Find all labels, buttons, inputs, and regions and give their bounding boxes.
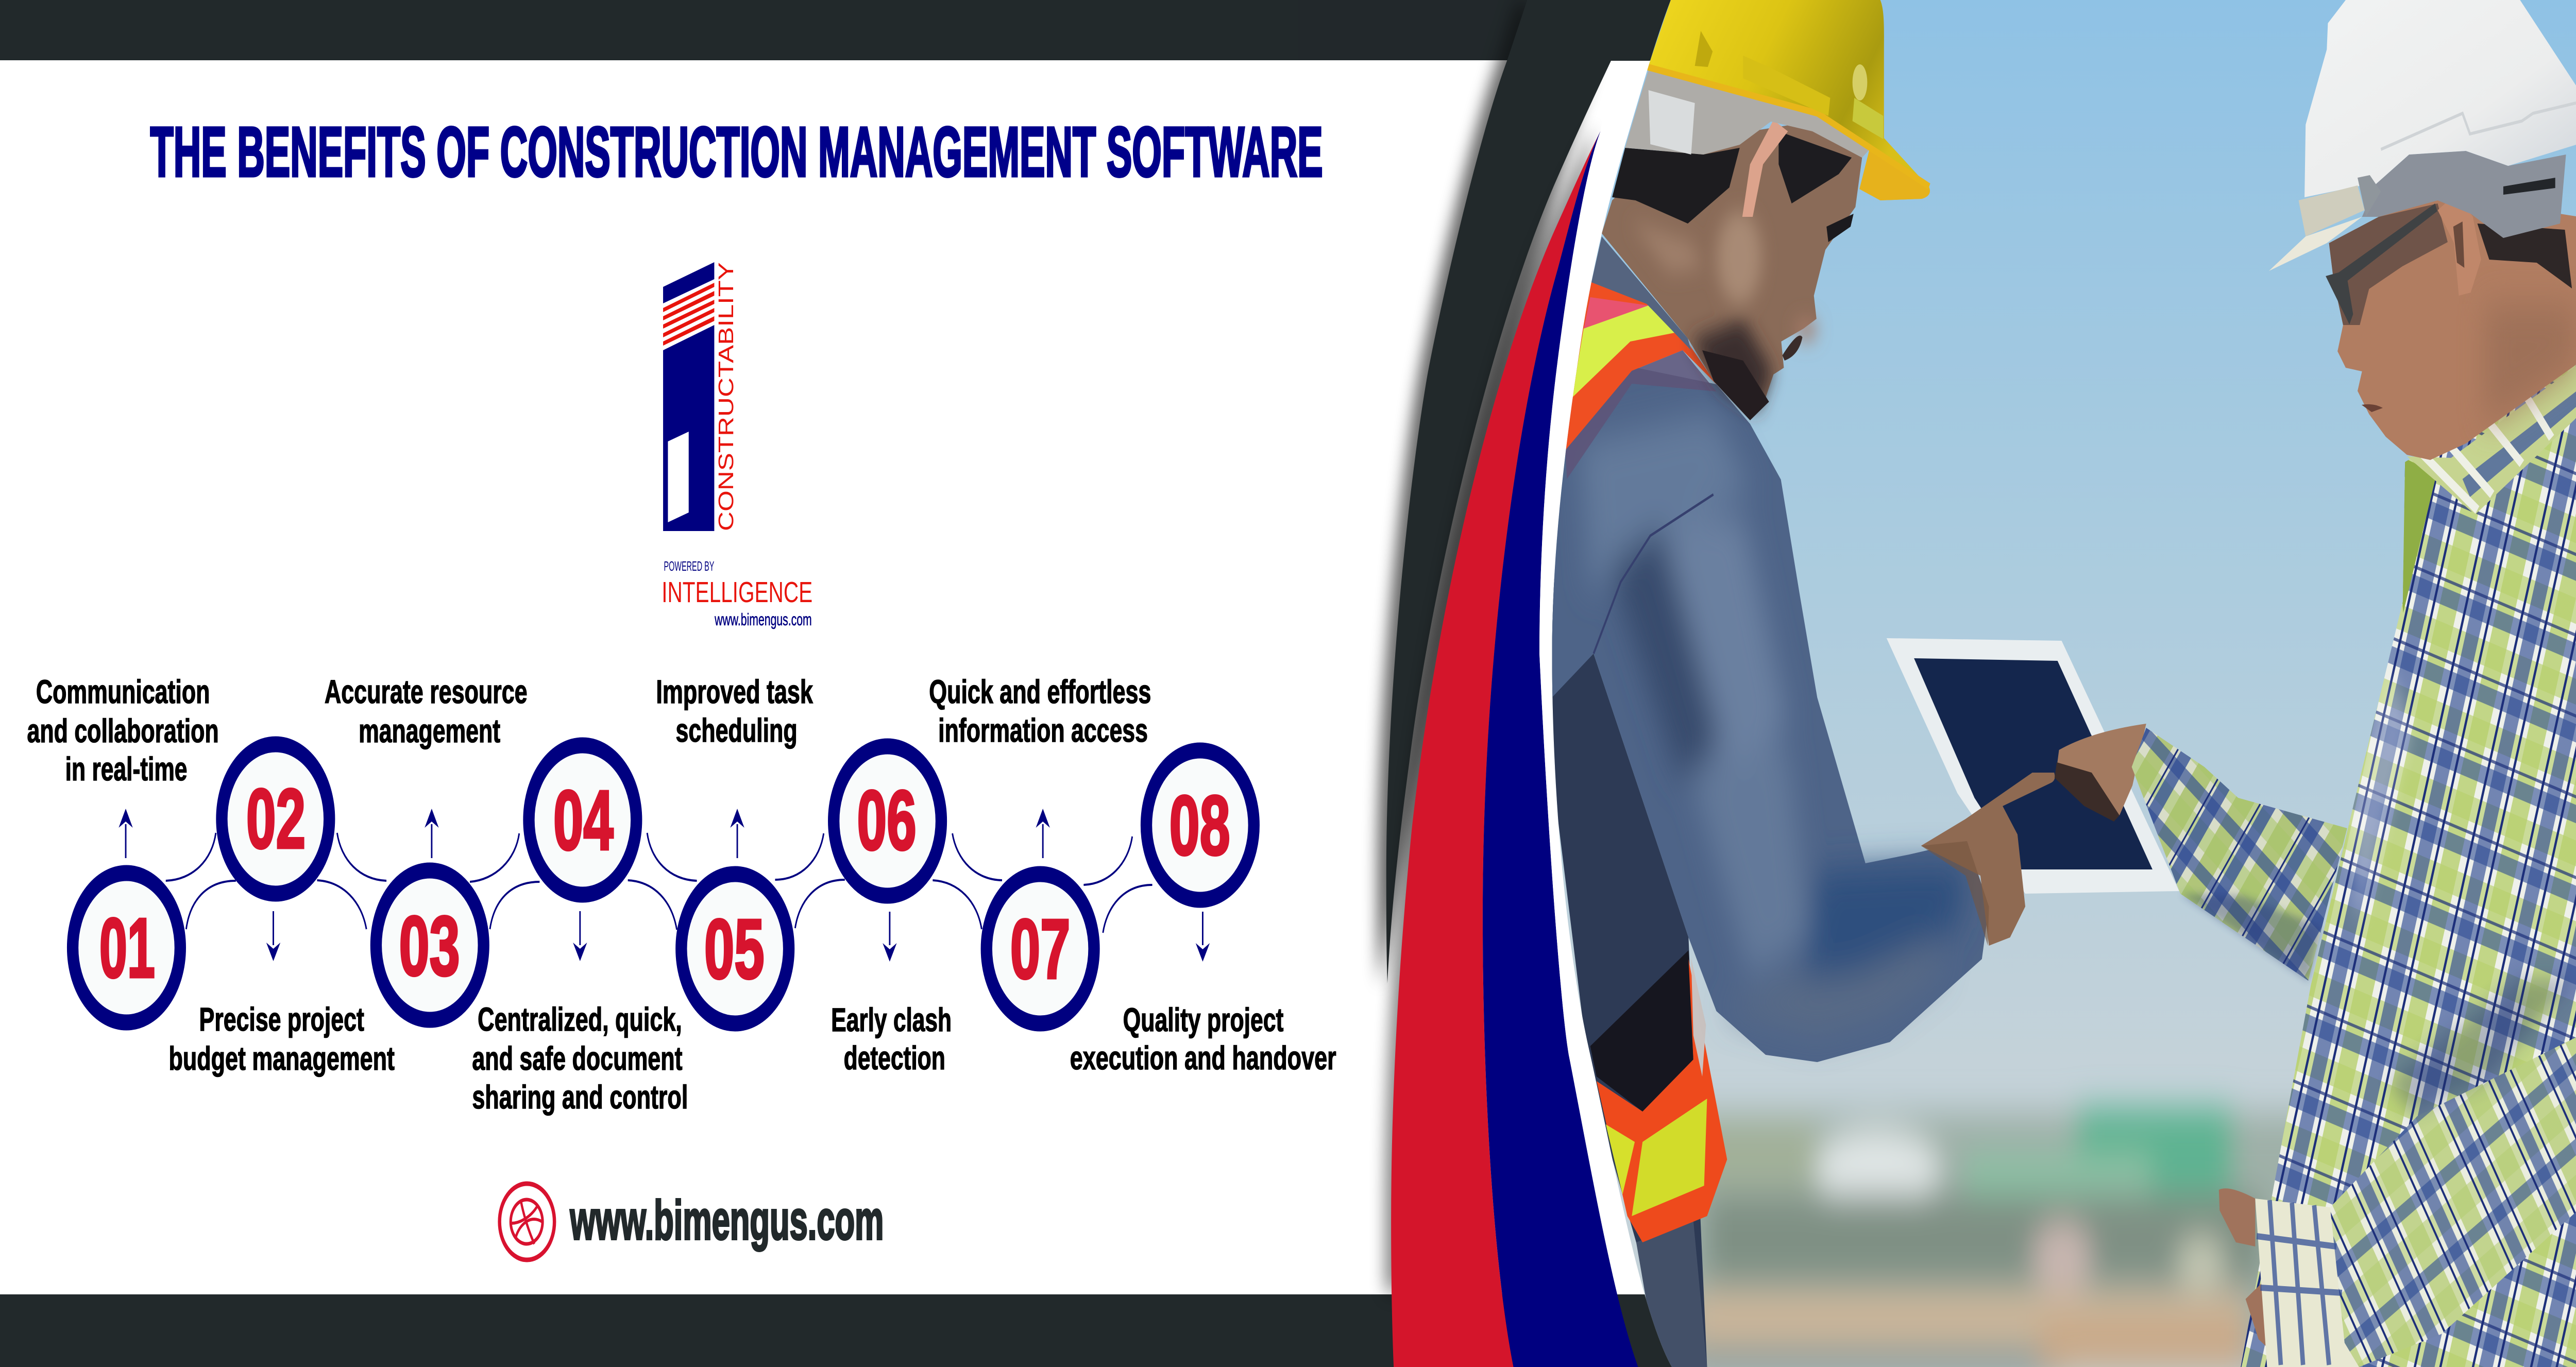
label: step 06 [831,1002,952,1076]
label: step 03: Accurate resource [325,674,528,710]
photo: two engineers with tablet [1520,0,2576,1367]
label: step 04 [472,1001,688,1116]
label: step 05: scheduling [676,712,798,749]
label: step 04: and safe document [472,1040,683,1077]
label: step 08 [1070,1002,1336,1076]
logo building mark [663,262,714,531]
collar [1591,236,1691,350]
label: step 03: management [359,713,500,749]
connectors between circles [166,833,1153,933]
top dark bar [0,0,1706,60]
white hard hat [2269,0,2576,271]
man 2: lower hand [2219,1188,2272,1352]
step 01 [73,873,180,1022]
step 02 [222,744,329,894]
man 2: plaid shirt torso [2241,365,2576,1367]
step 04: 04 [553,774,614,868]
step 05 [681,874,789,1023]
step 02: 02 [246,772,306,866]
tablet [1887,638,2179,894]
title: THE BENEFITS OF CONSTRUCTION MANAGEMENT SOFTWARE [150,113,1323,192]
sky background [1539,0,2576,1367]
label: step 04: Centralized, quick, [478,1001,682,1038]
label: step 07: information access [938,712,1148,749]
label: step 02 [169,1001,395,1077]
white curved band beside the photo [1539,61,1650,1294]
arrows [118,809,1210,962]
step 05: 05 [704,902,765,997]
benefits step chain [27,674,1336,1116]
powered by: POWERED BY [664,558,714,574]
ear [1742,120,1788,217]
step 08 [1146,750,1254,900]
label: step 05 [656,674,814,749]
blue band [1483,131,1638,1367]
yellow hard hat [1625,0,1930,200]
label: step 07: Quick and effortless [929,674,1151,710]
lower vest [1597,959,1727,1242]
hair [1612,148,1740,224]
label: step 01: and collaboration [27,713,219,749]
label: step 04: sharing and control [472,1079,688,1116]
step 07: 07 [1010,902,1070,997]
red and blue curved bands [1384,128,1638,1367]
step 01: 01 [99,901,155,996]
step 06: 06 [857,774,917,868]
website address: www.bimengus.com [570,1189,884,1251]
intelligence: INTELLIGENCE [662,575,812,609]
label: step 01: Communication [36,674,210,710]
man 1: head [1591,120,1862,420]
blurred horizon and site [1700,1083,2291,1367]
label: step 03 [325,674,528,749]
man 1: torso and vest [1552,579,1727,1367]
label: step 06: detection [844,1040,945,1076]
label: step 06: Early clash [831,1002,952,1038]
label: step 02: Precise project [199,1001,364,1038]
overall shirt shading [2388,979,2576,1113]
logo url: www.bimengus.com [714,610,812,629]
man 2: lower sleeve and cuff [2255,1037,2576,1367]
step 03 [376,870,484,1020]
label: step 08: execution and handover [1070,1040,1336,1076]
man 2: plaid shirt sleeve [2132,728,2347,981]
label: step 07 [929,674,1151,749]
red band [1391,131,1601,1367]
step 06 [834,746,941,896]
step 08: 08 [1170,779,1230,873]
label: step 01: in real-time [65,751,188,788]
label: step 08: Quality project [1123,1002,1283,1038]
logo: Constructability powered by Intelligence [662,262,812,629]
label: step 02: budget management [169,1040,395,1077]
ear [2438,194,2481,296]
man 1: shirt and sleeve [1539,361,1989,1062]
bottom dark bar [0,1294,1706,1367]
dark curved swoosh with drop shadow [1298,0,1671,983]
step 07 [987,874,1094,1023]
step 03: 03 [399,899,460,994]
step 04 [529,745,636,895]
back hair [2478,224,2572,288]
man 2: head and neck [2326,194,2576,460]
logo wordmark: CONSTRUCTABILITY [714,262,738,531]
man 2: hand holding tablet [2055,724,2146,822]
glasses [2326,203,2437,324]
man 1: pointing hand [1921,773,2055,946]
man 1: upper vest [1557,282,1716,479]
icon: website globe ball [500,1184,554,1260]
label: step 05: Improved task [656,674,814,710]
label: step 01 [27,674,219,788]
